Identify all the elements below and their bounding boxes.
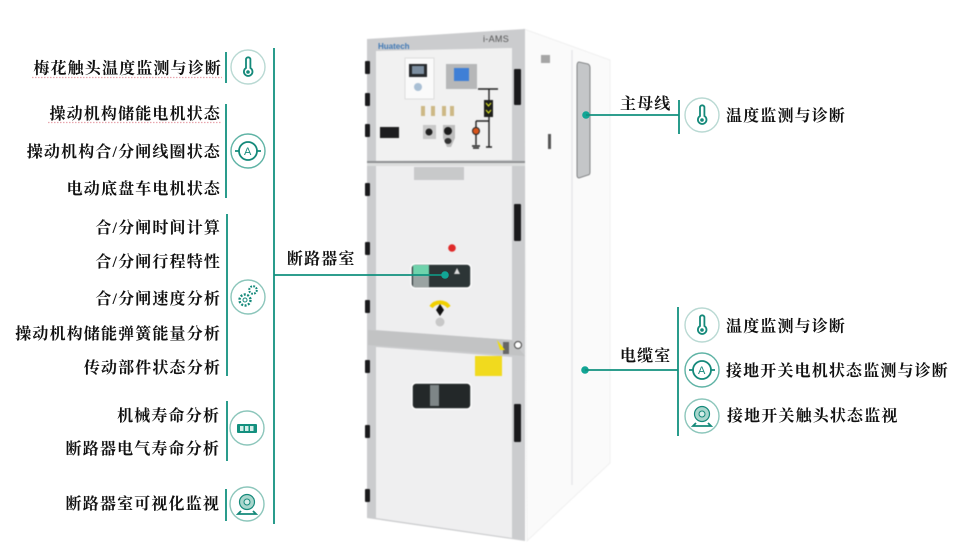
yellow operating handle xyxy=(431,302,449,326)
cabinet side xyxy=(524,29,610,541)
lower door xyxy=(376,347,512,538)
model label: i-AMS xyxy=(483,34,509,44)
group: visual monitoring xyxy=(66,487,264,521)
red indicator xyxy=(448,244,456,252)
group: mechanical characteristics: 合/分闸速度分析 xyxy=(95,289,221,308)
icon: gears xyxy=(231,280,265,314)
group: life analysis: 机械寿命分析 xyxy=(117,406,220,425)
group: motor status xyxy=(27,104,265,198)
cable chamber connector: 温度监测与诊断 xyxy=(726,316,846,336)
interlock hardware xyxy=(497,340,522,354)
group: motor status: 电动底盘车电机状态 xyxy=(67,179,222,198)
group: mechanical characteristics: 合/分闸行程特性 xyxy=(95,252,221,271)
icon: battery xyxy=(230,411,264,445)
breaker status window xyxy=(411,264,471,288)
counter display xyxy=(380,127,399,138)
main busbar connector: 温度监测与诊断 xyxy=(726,106,846,125)
group: motor status: 操动机构储能电机状态 xyxy=(49,104,222,123)
group: mechanical characteristics: 传动部件状态分析 xyxy=(84,358,221,377)
name plate xyxy=(414,167,464,180)
icon: ammeter xyxy=(685,353,719,387)
group: motor status: 操动机构合/分闸线圈状态 xyxy=(27,142,222,161)
group: life analysis: 断路器电气寿命分析 xyxy=(66,439,220,458)
upper door xyxy=(376,48,512,161)
middle door xyxy=(376,166,512,340)
cable chamber connector: 接地开关电机状态监测与诊断 xyxy=(726,361,949,380)
group: mechanical characteristics: 合/分闸时间计算 xyxy=(95,218,221,237)
icon: thermometer xyxy=(231,50,265,84)
icon: thermometer xyxy=(685,98,719,132)
group: mechanical characteristics: 操动机构储能弹簧能量分析 xyxy=(15,324,221,343)
side vent xyxy=(577,62,590,178)
cable chamber connector xyxy=(581,307,949,436)
mimic diagram xyxy=(472,89,498,148)
icon: camera xyxy=(230,487,264,521)
icon: camera xyxy=(685,399,719,433)
selector switches xyxy=(423,125,455,147)
door handles xyxy=(365,61,521,502)
brand label: Huatech xyxy=(378,42,410,51)
group: contact temperature xyxy=(32,50,265,84)
indicator lights xyxy=(421,106,454,116)
lower window xyxy=(412,383,471,409)
main connector: circuit breaker chamber xyxy=(274,48,449,524)
label: main busbar: 主母线 xyxy=(620,95,671,113)
label: circuit breaker chamber: 断路器室 xyxy=(287,249,356,268)
warning label xyxy=(475,356,502,376)
group: mechanical characteristics xyxy=(15,214,265,377)
icon: thermometer xyxy=(685,308,719,342)
group: life analysis xyxy=(66,401,264,461)
label: cable chamber: 电缆室 xyxy=(620,346,671,365)
protection relay xyxy=(405,58,434,99)
cable chamber connector: 接地开关触头状态监视 xyxy=(727,406,899,425)
icon: ammeter xyxy=(231,134,265,168)
main busbar connector xyxy=(582,95,846,134)
icon: ammeter: A xyxy=(698,365,706,377)
monitoring unit xyxy=(446,64,477,89)
middle band xyxy=(368,330,525,356)
switchgear cabinet xyxy=(365,29,610,541)
icon: ammeter: A xyxy=(244,146,252,158)
cabinet front frame xyxy=(367,29,525,541)
group: contact temperature: 梅花触头温度监测与诊断 xyxy=(33,58,222,78)
group: visual monitoring: 断路器室可视化监视 xyxy=(66,494,220,513)
